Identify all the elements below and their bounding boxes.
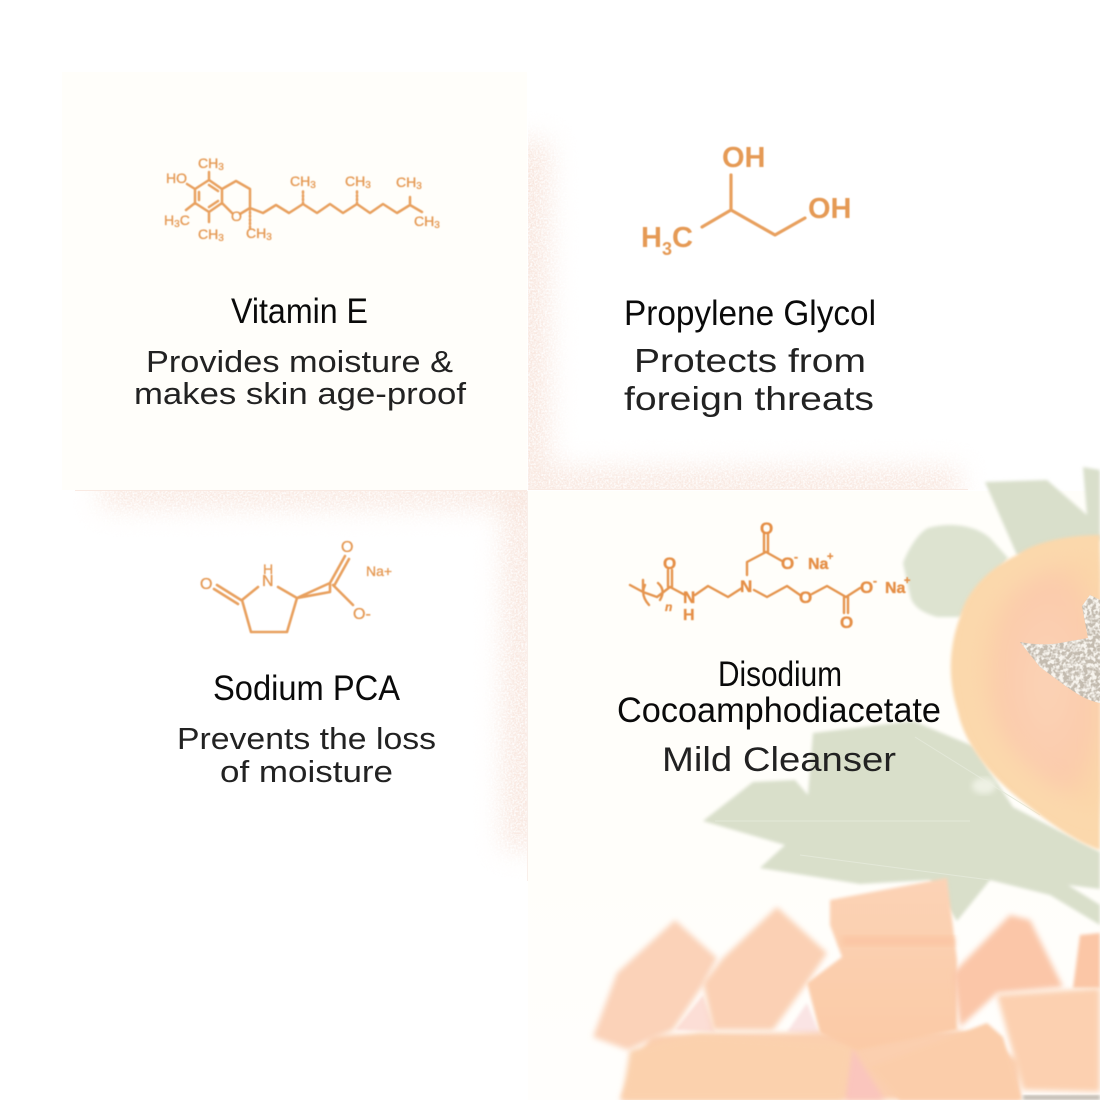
leaf: large lower bbox=[703, 721, 1100, 925]
panel shadows bbox=[75, 140, 968, 881]
icon: disodium cocoamphodiacetate molecule: Na bbox=[808, 556, 829, 573]
text: Sodium PCA benefit: Prevents the loss bbox=[177, 721, 436, 756]
icon: vitamin E molecule: 3 bbox=[434, 220, 440, 231]
icon: vitamin E molecule: 3 bbox=[416, 181, 422, 192]
icon: vitamin E molecule: CH bbox=[345, 173, 365, 189]
icon: disodium cocoamphodiacetate molecule: H bbox=[683, 607, 695, 624]
icon: sodium PCA molecule: H bbox=[263, 561, 273, 577]
icon: disodium cocoamphodiacetate molecule: + bbox=[827, 551, 833, 563]
heading: Disodium Cocoamphodiacetate bbox=[617, 655, 941, 730]
icon: disodium cocoamphodiacetate molecule: O bbox=[781, 554, 794, 573]
icon: vitamin E molecule: 3 bbox=[365, 180, 371, 191]
text: Propylene Glycol benefit: Protects from bbox=[634, 342, 866, 379]
icon: propylene glycol molecule: C bbox=[672, 222, 693, 254]
leaf gap bbox=[972, 778, 996, 794]
icon: disodium cocoamphodiacetate molecule: - bbox=[873, 574, 877, 588]
panel: Sodium PCA bbox=[177, 539, 436, 789]
icon: vitamin E molecule: 3 bbox=[310, 180, 316, 191]
panel: Vitamin E bbox=[134, 155, 466, 411]
icon: sodium PCA molecule: O bbox=[200, 576, 212, 593]
icon: disodium cocoamphodiacetate molecule: Na bbox=[885, 580, 906, 597]
leaf: top right bbox=[985, 467, 1100, 555]
heading: Disodium Cocoamphodiacetate: Disodium bbox=[718, 655, 842, 694]
heading: Vitamin E: Vitamin E bbox=[231, 292, 368, 331]
icon: vitamin E molecule: CH bbox=[396, 174, 416, 190]
heading: Propylene Glycol: Propylene Glycol bbox=[624, 294, 876, 333]
text: Vitamin E benefit: Provides moisture & bbox=[146, 344, 453, 379]
icon: propylene glycol molecule: OH bbox=[722, 142, 766, 174]
papaya flesh bbox=[983, 558, 1100, 810]
text: mild cleanser benefit: Mild Cleanser bbox=[662, 741, 896, 779]
icon: vitamin E molecule: 3 bbox=[174, 219, 180, 230]
icon: vitamin E molecule: CH bbox=[198, 226, 218, 242]
icon: disodium cocoamphodiacetate molecule: O bbox=[799, 588, 812, 607]
icon: disodium cocoamphodiacetate molecule: O bbox=[760, 519, 773, 538]
icon: disodium cocoamphodiacetate molecule: N bbox=[683, 588, 695, 607]
panel: bottom-right card background bbox=[528, 491, 1100, 1100]
icon: disodium cocoamphodiacetate molecule: - bbox=[794, 550, 798, 564]
photo: papaya and leaves bbox=[593, 467, 1100, 1100]
papaya half bbox=[951, 535, 1100, 850]
icon: disodium cocoamphodiacetate molecule: + bbox=[904, 575, 910, 587]
icon: vitamin E molecule: CH bbox=[198, 155, 218, 171]
icon: sodium PCA molecule: N bbox=[262, 573, 274, 590]
icon: disodium cocoamphodiacetate molecule: n bbox=[665, 600, 672, 614]
icon: vitamin E molecule: C bbox=[180, 212, 190, 228]
text: Propylene Glycol benefit bbox=[624, 342, 874, 417]
icon: vitamin E molecule: O bbox=[231, 208, 242, 224]
icon: vitamin E molecule: 3 bbox=[218, 162, 224, 173]
icon: propylene glycol molecule bbox=[641, 142, 852, 259]
icon: sodium PCA molecule: Na+ bbox=[366, 563, 392, 579]
icon: vitamin E molecule: H bbox=[164, 212, 174, 228]
icon: propylene glycol molecule: 3 bbox=[662, 239, 672, 259]
heading: Sodium PCA: Sodium PCA bbox=[213, 669, 401, 708]
icon: disodium cocoamphodiacetate molecule: O bbox=[663, 554, 676, 573]
icon: vitamin E molecule: CH bbox=[246, 225, 266, 241]
icon: vitamin E molecule bbox=[164, 155, 440, 244]
panel: Disodium Cocoamphodiacetate bbox=[617, 519, 941, 779]
heading: Disodium Cocoamphodiacetate: Cocoamphodiacetate bbox=[617, 691, 941, 730]
icon: sodium PCA molecule: O- bbox=[353, 606, 371, 623]
icon: vitamin E molecule: CH bbox=[414, 213, 434, 229]
papaya seeds bbox=[1020, 595, 1100, 703]
text: Propylene Glycol benefit: foreign threats bbox=[624, 380, 874, 417]
text: Vitamin E benefit bbox=[134, 344, 466, 411]
panel: top-left card background bbox=[62, 72, 527, 490]
icon: propylene glycol molecule: OH bbox=[808, 193, 852, 225]
text: Sodium PCA benefit: of moisture bbox=[220, 754, 393, 789]
text: Sodium PCA benefit bbox=[177, 721, 436, 789]
leaf veins bbox=[715, 737, 1040, 880]
icon: disodium cocoamphodiacetate molecule: N bbox=[740, 577, 752, 596]
icon: disodium cocoamphodiacetate molecule bbox=[630, 519, 910, 632]
icon: vitamin E molecule: CH bbox=[290, 173, 310, 189]
icon: vitamin E molecule: HO bbox=[166, 170, 187, 186]
panel: Propylene Glycol bbox=[624, 142, 876, 417]
icon: propylene glycol molecule: H bbox=[641, 222, 662, 254]
icon: disodium cocoamphodiacetate molecule: O bbox=[840, 613, 853, 632]
leaf: middle left bbox=[903, 525, 1008, 617]
icon: disodium cocoamphodiacetate molecule: O bbox=[860, 578, 873, 597]
icon: sodium PCA molecule: O bbox=[341, 539, 353, 556]
icon: vitamin E molecule: 3 bbox=[266, 232, 272, 243]
text: Vitamin E benefit: makes skin age-proof bbox=[134, 376, 466, 411]
icon: vitamin E molecule: 3 bbox=[218, 233, 224, 244]
icon: sodium PCA molecule bbox=[200, 539, 392, 632]
papaya cubes bbox=[593, 878, 1100, 1100]
